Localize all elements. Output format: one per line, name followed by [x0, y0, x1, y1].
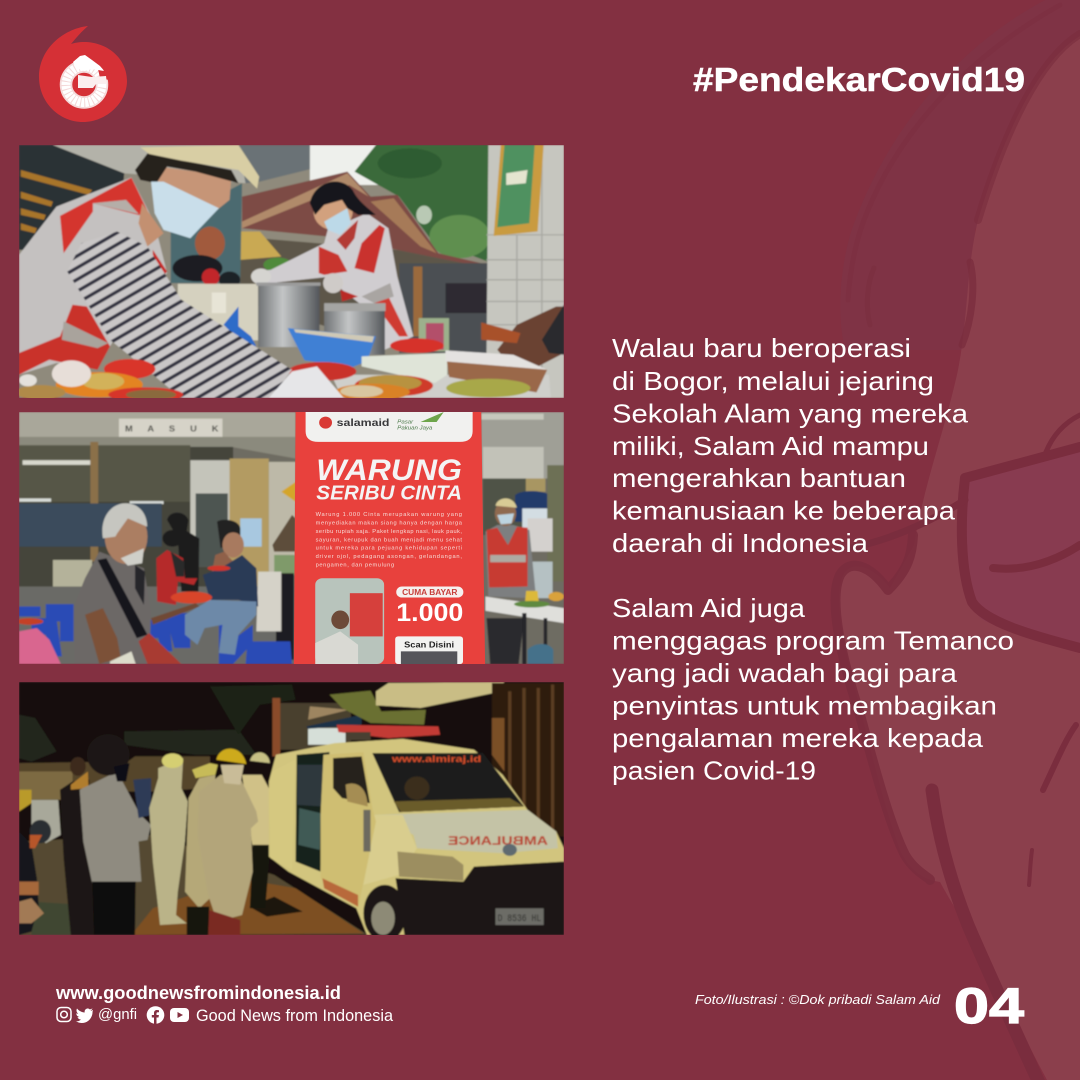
paragraph 2: pengalaman mereka kepada	[612, 723, 984, 753]
white counter	[178, 284, 258, 340]
person in pink	[19, 628, 61, 664]
sign: MASUK	[119, 419, 222, 439]
icon: instagram	[57, 1008, 71, 1022]
ambulance van	[269, 725, 564, 942]
stools	[19, 604, 292, 664]
first volunteer	[19, 145, 344, 398]
parked car and motorcycle	[19, 790, 61, 935]
roll-up banner: menyediakan makan siang hanya dengan harga	[316, 521, 463, 526]
hashtag heading: #PendekarCovid19	[693, 61, 1025, 98]
floor	[19, 587, 296, 664]
paragraph 1: Sekolah Alam yang mereka	[612, 398, 969, 428]
paragraph 2: pasien Covid-19	[612, 756, 816, 786]
blue basin	[288, 328, 376, 367]
plates of food	[15, 359, 183, 402]
van body	[269, 739, 564, 935]
buildings behind the van	[280, 703, 351, 750]
teal panel behind man	[171, 183, 242, 283]
rear open door	[296, 752, 330, 872]
road and ground	[19, 835, 367, 935]
roll-up banner	[294, 412, 485, 664]
table	[331, 375, 551, 398]
icon: twitter	[76, 1008, 93, 1023]
right side background	[481, 412, 564, 478]
photo 1: volunteers preparing food	[19, 145, 564, 398]
trays and plates on the table	[288, 338, 547, 400]
roll-up banner: 1.000	[396, 598, 463, 627]
table with food	[485, 591, 564, 664]
pots	[224, 282, 386, 355]
navy banner	[19, 503, 162, 547]
paragraph 1: daerah di Indonesia	[612, 528, 869, 558]
roll-up banner: sayuran, kerupuk dan buah menjadi menu sehat	[316, 537, 462, 543]
paragraph 1: mengerahkan bantuan	[612, 463, 906, 493]
second volunteer	[251, 182, 413, 353]
ambulance van: www.almiraj.id	[391, 754, 481, 765]
roll-up banner: pengamen, dan pemulung	[316, 562, 394, 568]
roll-up banner: Scan Disini	[404, 640, 454, 649]
roll-up banner: driver ojol, pedagang asongan, gelandangan,	[316, 554, 462, 560]
boy in red shirt	[156, 530, 197, 605]
roll-up banner: WARUNG	[316, 455, 462, 487]
roll-up banner: untuk mereka para pejuang kehidupan seperti	[316, 546, 462, 552]
roll-up banner: Warung 1.000 Cinta merupakan warung yang	[316, 512, 462, 518]
roll-up banner: CUMA BAYAR	[402, 588, 457, 597]
body text: two paragraphs	[612, 333, 1014, 786]
roll-up banner: Pasar	[397, 420, 414, 426]
old man with bag	[74, 503, 199, 664]
compound wall	[19, 756, 210, 791]
wooden fence	[492, 683, 564, 837]
footer: website and social handles: www.goodnewsfromindonesia.id	[55, 983, 341, 1003]
roll-up banner: seribu rupiah saja. Paket lengkap nasi, lauk pauk,	[316, 529, 462, 535]
footer: website and social handles: @gnfi	[98, 1006, 137, 1023]
photo 3: ambulance at night	[19, 682, 564, 935]
hands holding container	[481, 305, 564, 369]
icon: youtube	[170, 1008, 189, 1022]
paragraph 1: Walau baru beroperasi	[612, 333, 911, 363]
plate held by old man	[171, 592, 212, 603]
hazmat worker 1	[149, 753, 188, 925]
shop under roof	[238, 237, 488, 353]
roll-up banner: SERIBU CINTA	[316, 482, 462, 504]
hazmat workers 2 and 3	[185, 749, 274, 935]
headlight and bumper	[397, 852, 463, 881]
photo 2: Warung Seribu Cinta banner	[19, 412, 564, 664]
awning	[53, 145, 246, 183]
storefront	[19, 145, 124, 250]
seated woman eating	[185, 520, 258, 655]
volunteer on the right	[485, 498, 535, 664]
front wheel	[363, 885, 406, 942]
paragraph 1: miliki, Salam Aid mampu	[612, 431, 929, 461]
windshield	[372, 753, 524, 812]
house roof	[242, 172, 488, 273]
icon: facebook	[147, 1006, 164, 1024]
tree	[354, 145, 501, 263]
porch roof	[376, 682, 504, 708]
ambulance van: D 8536 HL	[498, 913, 541, 925]
interior	[19, 447, 233, 588]
paragraph 1	[612, 333, 969, 558]
footer: website and social handles	[55, 983, 394, 1025]
roll-up banner: Pakuan Jaya	[397, 425, 433, 431]
ambulance lettering: AMBULANCE	[448, 834, 548, 848]
paragraph 2: yang jadi wadah bagi para	[612, 658, 958, 688]
paragraph 2: penyintas untuk membagikan	[612, 690, 997, 720]
paragraph 2: menggagas program Temanco	[612, 626, 1014, 656]
foliage	[19, 715, 56, 761]
paragraph 1: kemanusiaan ke beberapa	[612, 496, 956, 526]
shop wall	[19, 412, 296, 445]
footer: website and social handles: Good News from Indonesia	[196, 1006, 394, 1025]
photo credit: Foto/Ilustrasi : ©Dok pribadi Salam Aid	[695, 993, 941, 1007]
standing person in black	[167, 513, 199, 592]
men in the foreground	[60, 734, 151, 935]
paragraph 2: Salam Aid juga	[612, 593, 806, 623]
helmets	[172, 255, 222, 281]
column with tiles and poster	[487, 145, 564, 398]
sign: MASUK: M A S U K	[125, 424, 219, 433]
palm leaves	[330, 691, 426, 725]
paragraph 1: di Bogor, melalui jejaring	[612, 366, 934, 396]
siren	[337, 725, 440, 738]
wall and pillar	[190, 460, 233, 567]
paragraph 2	[612, 593, 1014, 786]
logo: GNFI red badge	[39, 26, 127, 122]
roll-up banner: salamaid	[337, 418, 389, 429]
